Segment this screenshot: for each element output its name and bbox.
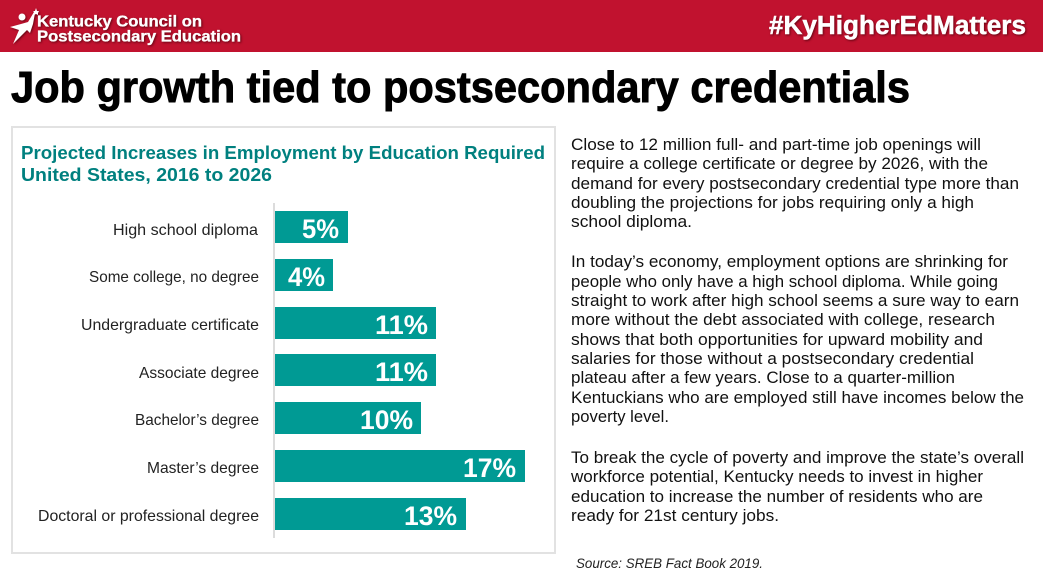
bar: Associate degree: Associate degree: [139, 365, 259, 382]
body text: paragraph 2: salaries for those without a postsecondary credential: [571, 350, 974, 368]
body text: paragraph 3: workforce potential, Kentucky needs to invest in higher: [570, 468, 984, 486]
bar: High school diploma: 5%: [302, 214, 339, 244]
body text: paragraph 2: straight to work after high school seems a sure way to earn: [571, 292, 1019, 310]
logo text: Kentucky Council on: [37, 14, 202, 30]
bar: Bachelor's degree: Bachelor’s degree: [135, 412, 259, 429]
bar: Bachelor's degree: [135, 402, 421, 435]
body text: paragraph 1: school diploma.: [571, 213, 692, 231]
chart heading: [21, 142, 545, 185]
bar: Some college, no degree: [89, 259, 333, 292]
body text: paragraph 1: require a college certificate or degree by 2026, with the: [571, 155, 988, 173]
source note: Source: SREB Fact Book 2019.: [576, 556, 763, 571]
bar: Master's degree: 17%: [463, 453, 516, 483]
bar: Master's degree: Master’s degree: [147, 460, 259, 477]
title: Job growth tied to postsecondary credentials: [11, 63, 910, 112]
bar: Doctoral or professional degree: [38, 498, 466, 531]
chart heading: United States, 2016 to 2026: [21, 164, 272, 185]
body text: paragraph 2: Kentuckians who are employed still have incomes below the: [571, 389, 1024, 407]
body text: paragraph 1: Close to 12 million full- and part-time job openings will: [571, 136, 981, 154]
bar: High school diploma: [113, 211, 348, 244]
body text: paragraph 2: [571, 253, 1024, 426]
logo text: Postsecondary Education: [37, 28, 241, 46]
body text: paragraph 2: poverty level.: [571, 408, 669, 426]
body text: paragraph 2: more without the debt associated with college, research: [571, 311, 995, 329]
header banner: [0, 0, 1043, 52]
axis line: [273, 203, 275, 538]
body text: paragraph 3: To break the cycle of poverty and improve the state’s overall: [571, 449, 1024, 467]
body text: paragraph 2: In today’s economy, employment options are shrinking for: [571, 253, 1009, 271]
bar: Some college, no degree: 4%: [288, 262, 325, 292]
body text: paragraph 3: education to increase the number of residents who are: [571, 488, 983, 506]
body text: paragraph 2: shows that both opportunities for upward mobility and: [571, 331, 983, 349]
body text: paragraph 1: [571, 136, 1019, 231]
bar: Doctoral or professional degree: 13%: [404, 501, 457, 531]
body text: paragraph 3: [570, 449, 1024, 525]
body text: paragraph 1: doubling the projections for jobs requiring only a high: [571, 194, 974, 212]
bar: Associate degree: [139, 354, 436, 387]
bar: Undergraduate certificate: 11%: [375, 310, 428, 340]
body text: paragraph 2: people who only have a high school diploma. While going: [571, 273, 998, 291]
icon: star figure logo: [10, 8, 39, 44]
bar: Some college, no degree: Some college, no degree: [89, 269, 259, 286]
bar: Bachelor's degree: 10%: [360, 405, 413, 435]
panel: bar chart: [12, 127, 555, 553]
bar: Undergraduate certificate: Undergraduate certificate: [81, 317, 259, 334]
body text: paragraph 2: plateau after a few years. Close to a quarter-million: [571, 369, 955, 387]
logo text: [37, 14, 241, 46]
bar: Master's degree: [147, 450, 525, 483]
chart heading: Projected Increases in Employment by Education Required: [21, 142, 545, 163]
hashtag: #KyHigherEdMatters: [769, 12, 1026, 40]
body text: paragraph 1: demand for every postsecondary credential type more than: [571, 175, 1019, 193]
bar: High school diploma: High school diploma: [113, 222, 258, 239]
body text: paragraph 3: ready for 21st century jobs.: [571, 507, 779, 525]
bar: Associate degree: 11%: [375, 357, 428, 387]
bar: Undergraduate certificate: [81, 307, 436, 340]
bar: Doctoral or professional degree: Doctoral or professional degree: [38, 508, 259, 525]
